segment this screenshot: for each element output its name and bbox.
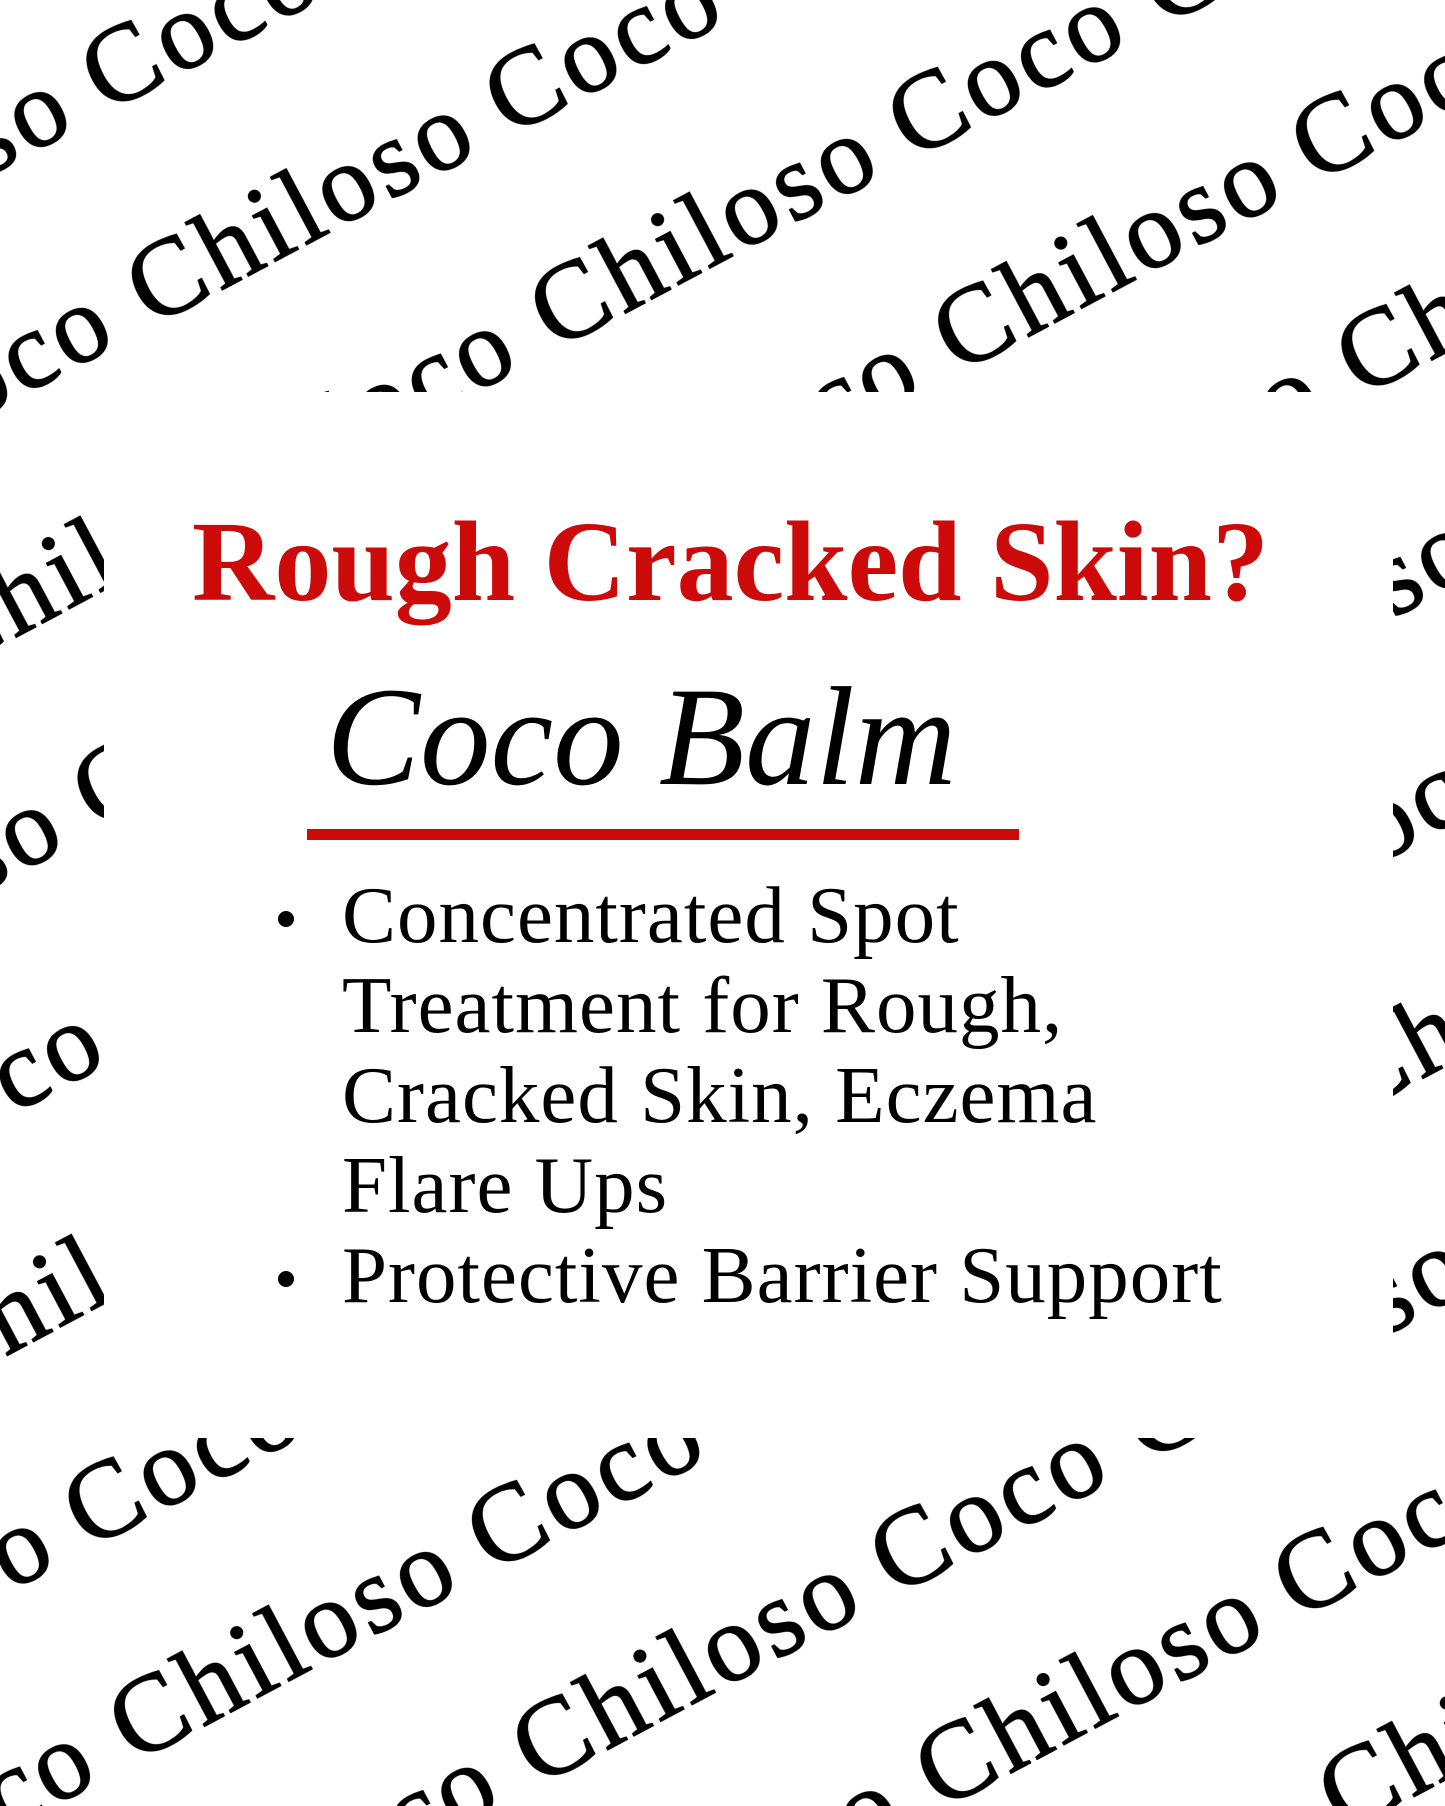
title: Rough Cracked Skin? — [192, 498, 1269, 625]
panel: central white card — [104, 392, 1393, 1438]
bullet: spot treatment: Treatment for Rough, — [342, 960, 1063, 1050]
bullet list — [278, 870, 1223, 1320]
subtitle: product name: Coco Balm — [326, 659, 957, 815]
red underline — [307, 829, 1019, 840]
bullet: spot treatment: Concentrated Spot — [342, 870, 960, 960]
bullet: spot treatment: Flare Ups — [342, 1140, 668, 1230]
bullet: spot treatment — [278, 870, 1097, 1230]
bullet: barrier support: Protective Barrier Support — [342, 1230, 1223, 1320]
bullet: spot treatment: Cracked Skin, Eczema — [342, 1050, 1097, 1140]
